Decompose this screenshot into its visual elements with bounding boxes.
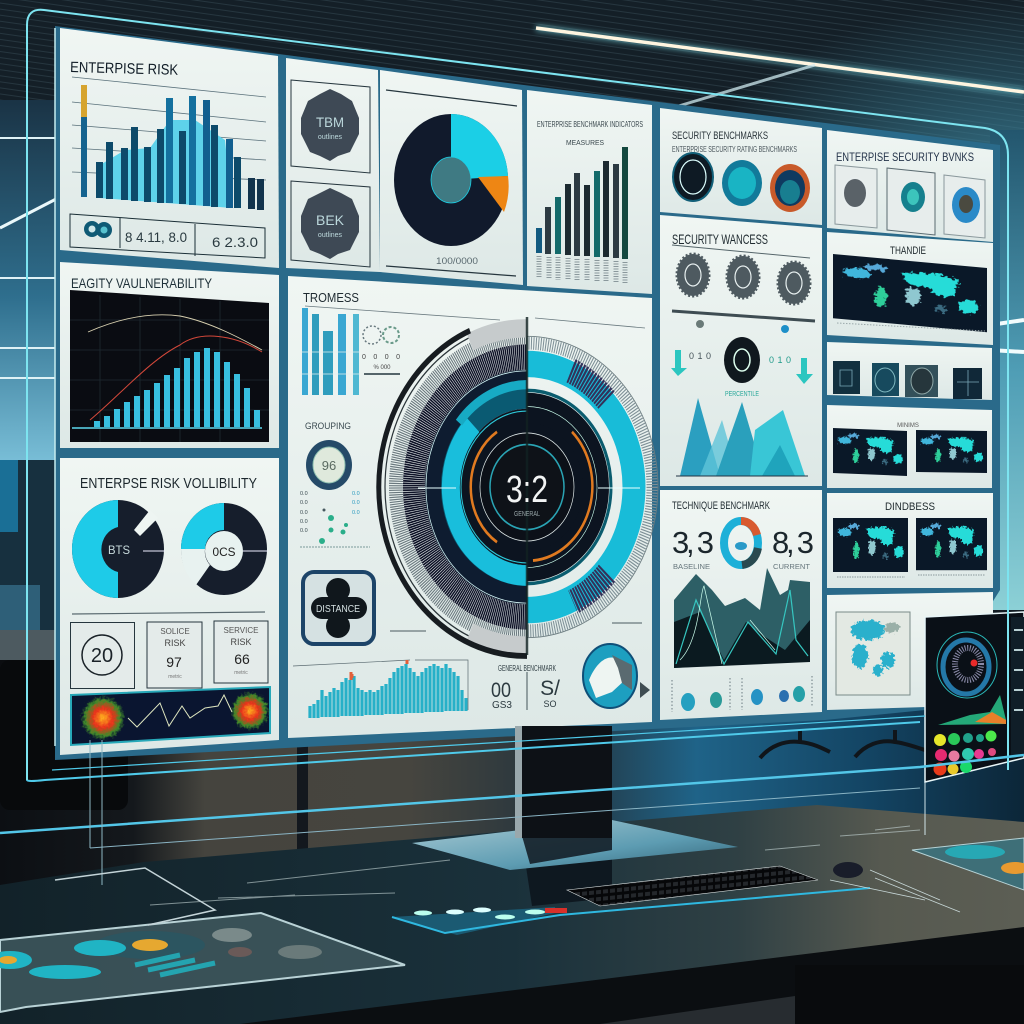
value captions (673, 564, 811, 571)
panel title: THANDIE (890, 245, 926, 257)
panel: enterprise risk volatility (60, 458, 279, 755)
monitor base (412, 820, 738, 870)
donut (724, 521, 758, 565)
stat row: 6 2.3.0 (212, 234, 258, 250)
panel: benchmark bars (527, 90, 652, 294)
panel: vulnerability chart (60, 262, 279, 448)
donut chart right (181, 503, 268, 595)
bar chart (536, 147, 628, 283)
panel: map pair two (827, 493, 993, 588)
mini spectrum (938, 695, 1006, 725)
small rings and labels (362, 326, 400, 374)
cloud logo badge: DISTANCE (316, 604, 360, 615)
desk tablet left (0, 913, 405, 1012)
stat box: circle score (70, 622, 134, 688)
summary numbers: GS3 (492, 700, 512, 711)
badge card two: outlines (318, 232, 343, 239)
stat row (70, 214, 265, 258)
panel: central dial (288, 276, 669, 738)
stat box: circle score: 20 (91, 645, 113, 667)
badge card two: BEK (316, 212, 345, 228)
panel: security indices (660, 215, 822, 486)
mouse (833, 862, 863, 878)
stat box: metric one: SOLICE (160, 627, 190, 636)
value captions: CURRENT (773, 564, 811, 571)
light strips (0, 28, 1024, 378)
badge card one: outlines (318, 134, 343, 141)
small rings and labels: % 000 (373, 365, 391, 371)
stat box: metric one (147, 622, 202, 688)
keyboard (567, 866, 818, 906)
pie caption: 100/0000 (436, 256, 478, 266)
side dark tablet (925, 612, 1024, 782)
central status icon (724, 337, 760, 383)
donut chart left (72, 500, 165, 598)
scatter legend: 0.0 (300, 528, 308, 534)
panel: map pair one (827, 405, 992, 488)
panel: security benchmarks (660, 108, 822, 225)
stat box: metric one: 97 (166, 654, 182, 670)
scatter legend: 0.0 (300, 510, 308, 516)
status marks (689, 320, 791, 365)
panel title: TECHNIQUE BENCHMARK (672, 500, 770, 512)
down arrow right (796, 358, 813, 384)
heatmap strip (71, 687, 270, 745)
scatter legend: 0.0 (352, 500, 360, 506)
panel title: ENTERPSE RISK VOLLIBILITY (80, 475, 257, 492)
stat box: metric one: metric (168, 674, 182, 680)
mini indicators row (672, 676, 812, 712)
layered line chart (674, 568, 810, 668)
panel title: SECURITY WANCESS (672, 231, 768, 247)
gear icons (677, 254, 810, 304)
panel: enterprise risk bar chart (60, 28, 279, 268)
panel title: TROMESS (303, 290, 359, 305)
pie chart (394, 114, 509, 246)
summary numbers: GENERAL BENCHMARK (498, 664, 556, 673)
radar rings (937, 632, 997, 698)
panel: scatter map (827, 592, 993, 710)
status marks: 0 1 0 (689, 351, 711, 361)
panel title: ENTERPISE SECURITY BVNKS (836, 150, 974, 164)
stat box: metric two (214, 621, 268, 683)
value right: 8, 3 (772, 525, 814, 560)
world maps (833, 428, 987, 476)
small donut: 96 (322, 458, 336, 473)
tablet graphics (0, 928, 322, 979)
scatter legend (300, 491, 370, 547)
grouping label: GROUPING (305, 421, 351, 431)
summary numbers: SO (543, 699, 557, 709)
mini bar chart (300, 308, 360, 395)
gauge icon one (673, 153, 713, 201)
round icon (583, 644, 637, 708)
dial gauge (379, 317, 669, 656)
stat row: 8 4.11, 8.0 (125, 229, 187, 245)
down arrow left (671, 350, 687, 376)
panel title: SECURITY BENCHMARKS (672, 130, 768, 142)
stat box: metric two: 66 (234, 651, 250, 667)
cluster plot (851, 620, 899, 676)
chart tag: PERCENTILE (725, 391, 759, 398)
panel title: DINDBESS (885, 501, 935, 513)
stat box: metric two: metric (234, 670, 248, 676)
summary numbers: S/ (540, 677, 560, 700)
gauge icon two (722, 160, 762, 206)
scatter legend: 0.0 (352, 491, 360, 497)
badge card one (291, 80, 370, 173)
badge card one: TBM (316, 114, 344, 130)
scatter legend: 0.0 (300, 500, 308, 506)
dial value: 3:2 (506, 469, 548, 511)
panel: thumbnail tiles (827, 342, 992, 400)
chart title: ENTERPRISE BENCHMARK INDICATORS (537, 120, 643, 129)
value captions: BASELINE (673, 564, 710, 571)
bar chart (72, 77, 266, 210)
small donut (306, 440, 352, 490)
chart subtitle: MEASURES (566, 140, 604, 147)
scatter legend: 0.0 (300, 491, 308, 497)
panel title: EAGITY VAULNERABILITY (71, 275, 213, 291)
world maps (833, 518, 987, 572)
badge card two (291, 181, 370, 267)
value left: 3, 3 (672, 525, 714, 560)
colored status dots (934, 730, 996, 776)
glass panel backing (55, 26, 1000, 760)
histogram (293, 660, 468, 718)
panel subtitle: ENTERPRISE SECURITY RATING BENCHMARKS (672, 145, 797, 154)
world map (833, 254, 987, 332)
desk (0, 805, 1024, 1024)
gauge icon three (770, 164, 810, 212)
donut chart left: BTS (108, 543, 130, 557)
card one (835, 165, 877, 228)
thumbnails (833, 361, 982, 399)
card two (887, 168, 935, 235)
panel: pie chart (380, 70, 523, 285)
panel title: ENTERPISE RISK (70, 59, 178, 79)
cloud logo badge (303, 572, 374, 644)
scatter legend: 0.0 (300, 519, 308, 525)
dial caption: GENERAL (514, 511, 540, 518)
play arrow (640, 682, 650, 698)
panel: benchmark trends (660, 490, 822, 720)
panel: badges (286, 58, 380, 272)
stat box: metric one: RISK (164, 638, 186, 648)
panel: enterprise security cards (827, 130, 993, 242)
card three (944, 175, 985, 238)
donut chart right: 0CS (212, 545, 236, 559)
summary numbers: 00 (491, 679, 511, 702)
mountain chart (676, 398, 808, 476)
scatter legend: 0.0 (352, 510, 360, 516)
summary numbers (491, 664, 560, 711)
desk tablet right (830, 838, 1024, 912)
status marks: 0 1 0 (769, 355, 791, 365)
panel title: MINIMS (897, 423, 919, 429)
stat box: metric two: RISK (230, 637, 252, 647)
panel: threat map (827, 232, 993, 345)
chair silhouette and desk stand posts (0, 660, 925, 850)
area chart (70, 290, 269, 442)
small rings and labels: 0 0 0 0 (362, 354, 400, 361)
stat box: metric two: SERVICE (224, 626, 258, 635)
monitor stand (412, 726, 738, 906)
desk glow device (392, 888, 870, 935)
